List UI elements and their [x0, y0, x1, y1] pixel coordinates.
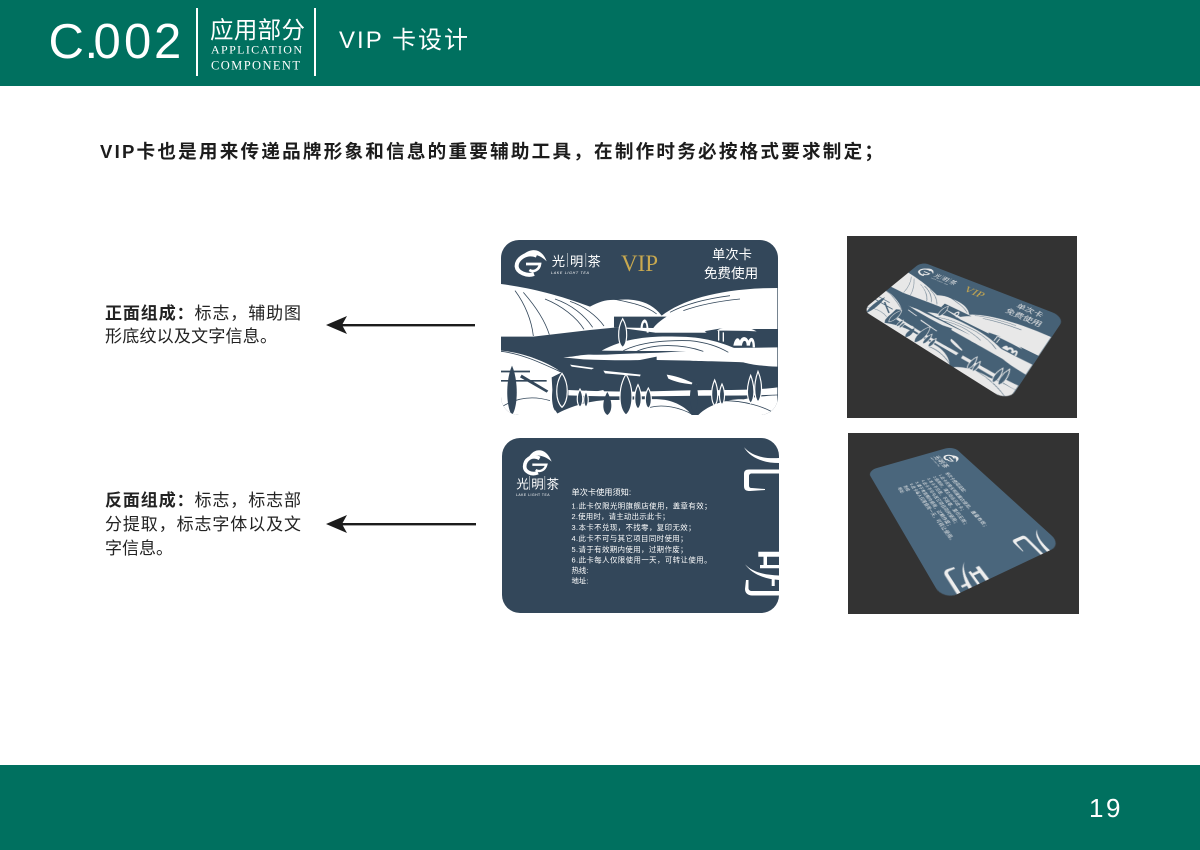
section title Chinese: 应用部分 — [210, 17, 305, 43]
front description: 形底纹以及文字信息。 — [105, 327, 277, 346]
back card — [502, 438, 779, 613]
back description — [105, 490, 301, 558]
front description — [105, 303, 301, 346]
front description: 正面组成：标志，辅助图 — [105, 303, 301, 323]
page subject: VIP 卡设计 — [339, 27, 468, 54]
footer band — [0, 765, 1200, 850]
front card — [501, 240, 778, 415]
back card mockup — [848, 433, 1079, 614]
arrow: back — [326, 515, 476, 533]
section title English line 1: APPLICATION — [211, 42, 302, 56]
back description: 字信息。 — [105, 539, 173, 558]
section title English line 2: COMPONENT — [211, 58, 300, 72]
page number: 19 — [1089, 793, 1120, 823]
section code: C.002 — [48, 15, 181, 69]
back description: 反面组成：标志，标志部 — [105, 490, 301, 510]
intro heading: VIP卡也是用来传递品牌形象和信息的重要辅助工具，在制作时务必按格式要求制定； — [100, 141, 883, 162]
header band — [0, 0, 1200, 86]
back description: 分提取，标志字体以及文 — [105, 515, 301, 534]
arrow: front — [326, 316, 475, 334]
front card mockup — [847, 236, 1077, 418]
